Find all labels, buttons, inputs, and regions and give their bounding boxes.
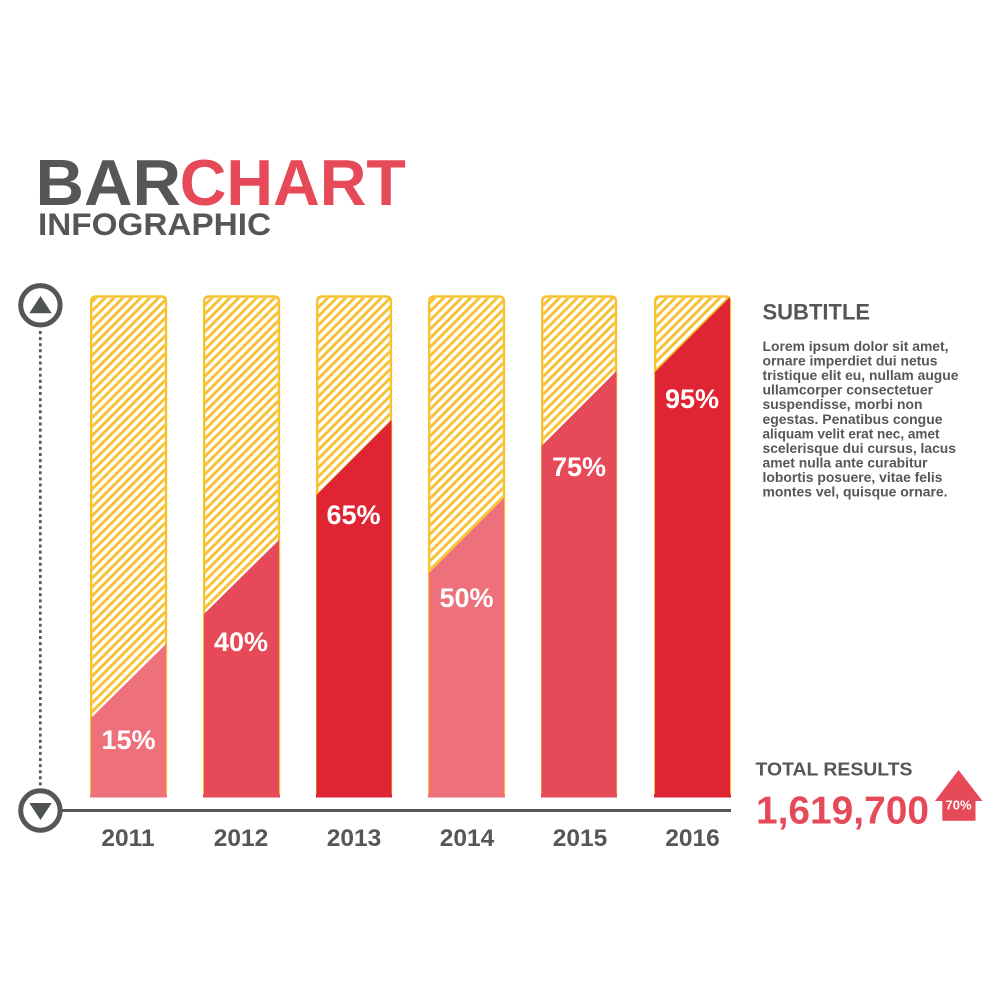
body text xyxy=(762,339,959,500)
year labels: 2012 xyxy=(214,825,268,852)
body text: Lorem ipsum dolor sit amet, xyxy=(762,339,948,354)
total results label: TOTAL RESULTS xyxy=(756,759,912,780)
body text: suspendisse, morbi non xyxy=(762,397,922,412)
body text: lobortis posuere, vitae felis xyxy=(762,470,942,485)
value label: 65% xyxy=(326,500,381,530)
title xyxy=(36,147,406,242)
year labels: 2016 xyxy=(665,825,720,852)
body text: montes vel, quisque ornare. xyxy=(762,484,948,500)
icon: up arrow with percentage xyxy=(935,770,982,821)
icon: up arrow xyxy=(21,286,60,325)
title: BAR xyxy=(36,147,181,219)
body text: ullamcorper consectetuer xyxy=(762,382,934,398)
horizontal axis xyxy=(62,809,731,812)
body text: scelerisque dui cursus, lacus xyxy=(762,441,956,456)
title: INFOGRAPHIC xyxy=(38,206,271,242)
body text: ornare imperdiet dui netus xyxy=(762,354,938,368)
total results value: 1,619,700 xyxy=(756,790,929,832)
icon: down arrow xyxy=(21,791,60,830)
year labels: 2014 xyxy=(440,825,495,852)
icon: up arrow with percentage: 70% xyxy=(945,797,972,812)
value label: 40% xyxy=(214,627,268,657)
bar 2015 xyxy=(541,296,617,798)
body text: aliquam velit erat nec, amet xyxy=(762,426,940,442)
body text: tristique elit eu, nullam augue xyxy=(762,368,959,383)
bar 2014 xyxy=(428,296,505,798)
body text: egestas. Penatibus congue xyxy=(762,412,943,427)
year labels: 2013 xyxy=(327,825,381,852)
bar 2013 xyxy=(316,296,392,798)
year labels: 2011 xyxy=(101,825,155,852)
value label: 95% xyxy=(665,384,719,414)
year labels: 2015 xyxy=(553,825,607,852)
title: CHART xyxy=(180,147,406,219)
value label: 75% xyxy=(552,452,606,482)
bar 2016 xyxy=(654,296,731,798)
value label: 15% xyxy=(101,725,156,755)
vertical axis with arrows xyxy=(21,286,60,830)
bar 2011 xyxy=(90,296,167,798)
body text: amet nulla ante curabitur xyxy=(762,456,928,470)
value label: 50% xyxy=(439,583,494,613)
year labels xyxy=(101,825,720,852)
subtitle: SUBTITLE xyxy=(762,300,870,324)
bar 2012 xyxy=(203,296,280,798)
